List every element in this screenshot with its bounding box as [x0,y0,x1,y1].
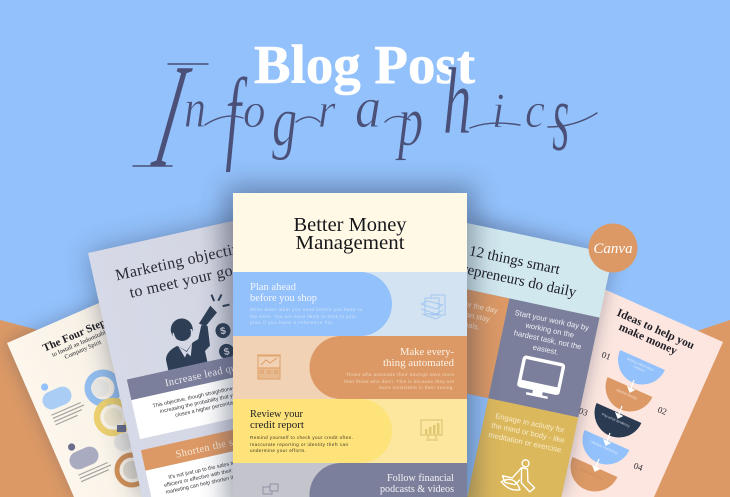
step one pill [36,372,87,427]
ring diagram [88,373,147,485]
bowl 4: Lifestyle marketing [589,439,618,455]
card: 12 things smart entrepreneurs do daily: 12 things smart [468,243,562,278]
card title: make money [617,321,679,358]
row 4: follow financial podcasts: podcasts & videos [380,484,454,495]
row 1: plan ahead: before you shop [250,293,317,304]
bowl 3 [587,403,641,445]
illustration: person with megaphone and coins: $ [223,346,231,358]
bowl 5: Business ideas [580,468,604,481]
card: marketing objectives: closes a higher percentage [175,399,239,419]
title: infographics: f [225,57,248,174]
bowl 2 [598,377,652,419]
arrows between bowls [593,380,634,471]
row 3: review your credit report: undermine your efforts. [250,448,306,453]
card: 12 things smart entrepreneurs do daily: working on the [524,320,575,340]
card: ideas to help you make money [415,265,723,497]
icon: monitor [516,357,565,401]
title: infographics: g [272,82,297,161]
card: 12 things smart entrepreneurs do daily: Engage in activity for [495,411,566,435]
row 1: plan ahead [233,272,467,336]
bowl 4 [575,430,629,472]
card: 12 things smart entrepreneurs do daily: so you can stay [438,304,491,324]
card: marketing objectives: increasing the probability that your team [160,388,255,415]
step labels: 03 [577,405,590,418]
title: infographics: s [552,61,570,172]
title: infographics: h [443,48,472,154]
card title [114,237,260,304]
main card title: Management [296,233,405,254]
title: infographics: r [318,84,336,139]
card: marketing objectives: Increase lead quality [164,358,258,389]
icon: presentation board [257,355,281,379]
bowl 1: content [632,364,645,373]
main card: better money management [233,193,467,497]
title: infographics: p [395,82,423,161]
section: shorten the sales cycle [141,411,321,471]
row 4: follow financial podcasts: Follow financial [387,473,454,484]
main card title: Better Money [294,215,407,236]
card: 12 things smart entrepreneurs do daily: hardest task, not the [513,328,582,351]
row 2: make everything automated: Make every- [400,347,454,358]
bowl 3: Pay what tendency [601,412,631,428]
card title: Marketing objectives [114,237,256,284]
cell: blue [352,374,488,496]
main card shadow [225,186,475,497]
card: 12 things smart entrepreneurs do daily: Set goals for the day [429,292,499,315]
step labels: 01 [600,349,612,362]
card: marketing objectives: marketing can help shorten it [165,475,234,496]
step labels: 04 [632,460,645,473]
bowl 1: Setting information [626,357,655,372]
row 1: plan ahead: plan if you have a reference list. [250,320,334,325]
card: marketing objectives [88,212,341,497]
card title: Company Spirit [64,339,103,361]
card title [41,314,118,367]
swash strokes of the script lettering [133,64,597,166]
row 2: make everything automated: more consistent in their saving. [379,385,454,390]
row 1: plan ahead: Plan ahead [250,282,297,293]
canva badge [588,224,638,272]
title: infographics: n [184,78,206,139]
bowl 1 [610,350,665,392]
cell: orange [373,274,509,398]
bowl 5 [563,457,617,497]
icon: documents in hand [421,295,445,319]
cell: slate [488,298,599,417]
title: blog post: Blog Post [254,34,476,95]
row 3: review your credit report: credit report [250,420,304,431]
title: infographics: o [243,84,265,139]
card: marketing objectives: efficient or effective with their time, [164,465,246,489]
step labels: 02 [656,404,668,417]
illustration: person with megaphone and coins [154,291,241,372]
card: 12 things smart entrepreneurs do daily: the mind or body - like [491,421,565,445]
card: marketing objectives: This objective, though straightforward, is about [152,379,263,410]
header [394,210,613,318]
icon: monitor chart [421,420,442,440]
bowl 2: Market trends [616,388,638,401]
title: infographics: i [492,84,505,139]
row 1: plan ahead: the store. You are more likely to stick to your [250,314,356,319]
row 3: review your credit report: Review your [250,409,303,420]
card title: to Install an Indomitable [51,328,110,359]
title: infographics: I [142,33,201,199]
row 3: review your credit report: Remind yourself to check your credit often. [250,435,353,440]
icon: person riding [500,456,540,494]
cell: slate lower [340,472,467,497]
card: 12 things smart entrepreneurs do daily: on your goals. [433,313,481,332]
card: 12 things smart entrepreneurs do daily: easiest. [532,342,559,357]
card: the four steps [7,267,285,497]
card: 12 things smart entrepreneurs do daily [340,210,613,497]
step labels [577,349,668,473]
card: 12 things smart entrepreneurs do daily: meditation or exercise. [488,430,564,455]
row 2: make everything automated [233,336,467,399]
cell: yellow [460,398,578,497]
card title: The Four Steps [41,314,112,354]
row 2: make everything automated: than those who don't. This is because they are [344,379,454,384]
step two pill [63,432,113,483]
card: 12 things smart entrepreneurs do daily: Start your work day by [514,308,590,333]
title: infographics [133,33,597,199]
card: 12 things smart entrepreneurs do daily: entrepreneurs do daily [443,257,578,301]
canva badge: Canva [593,241,633,257]
illustration: person with megaphone and coins: $ [219,326,228,338]
card: marketing objectives: It's not just up to the sales team to be [168,456,256,481]
card title: to meet your goals [128,258,253,302]
main card title [294,215,407,254]
title: infographics: a [355,75,381,140]
row 2: make everything automated: thing automated [383,358,455,369]
row 3: review your credit report [233,399,467,463]
icon: chat screens [263,484,278,494]
card: marketing objectives: Shorten the sales cycle [175,428,277,461]
card title: Ideas to help you [615,307,697,352]
row 3: review your credit report: Inaccurate reporting or identity theft can [250,442,348,447]
title: infographics: c [525,84,545,139]
orange shape right [540,320,730,497]
section: increase lead quality [127,341,307,400]
orange shape left [0,320,200,497]
row 1: plan ahead: Write down what you need before you head to [250,307,362,312]
row 4: follow financial podcasts [233,463,467,497]
row 2: make everything automated: Those who automate their savings save more [346,372,454,377]
